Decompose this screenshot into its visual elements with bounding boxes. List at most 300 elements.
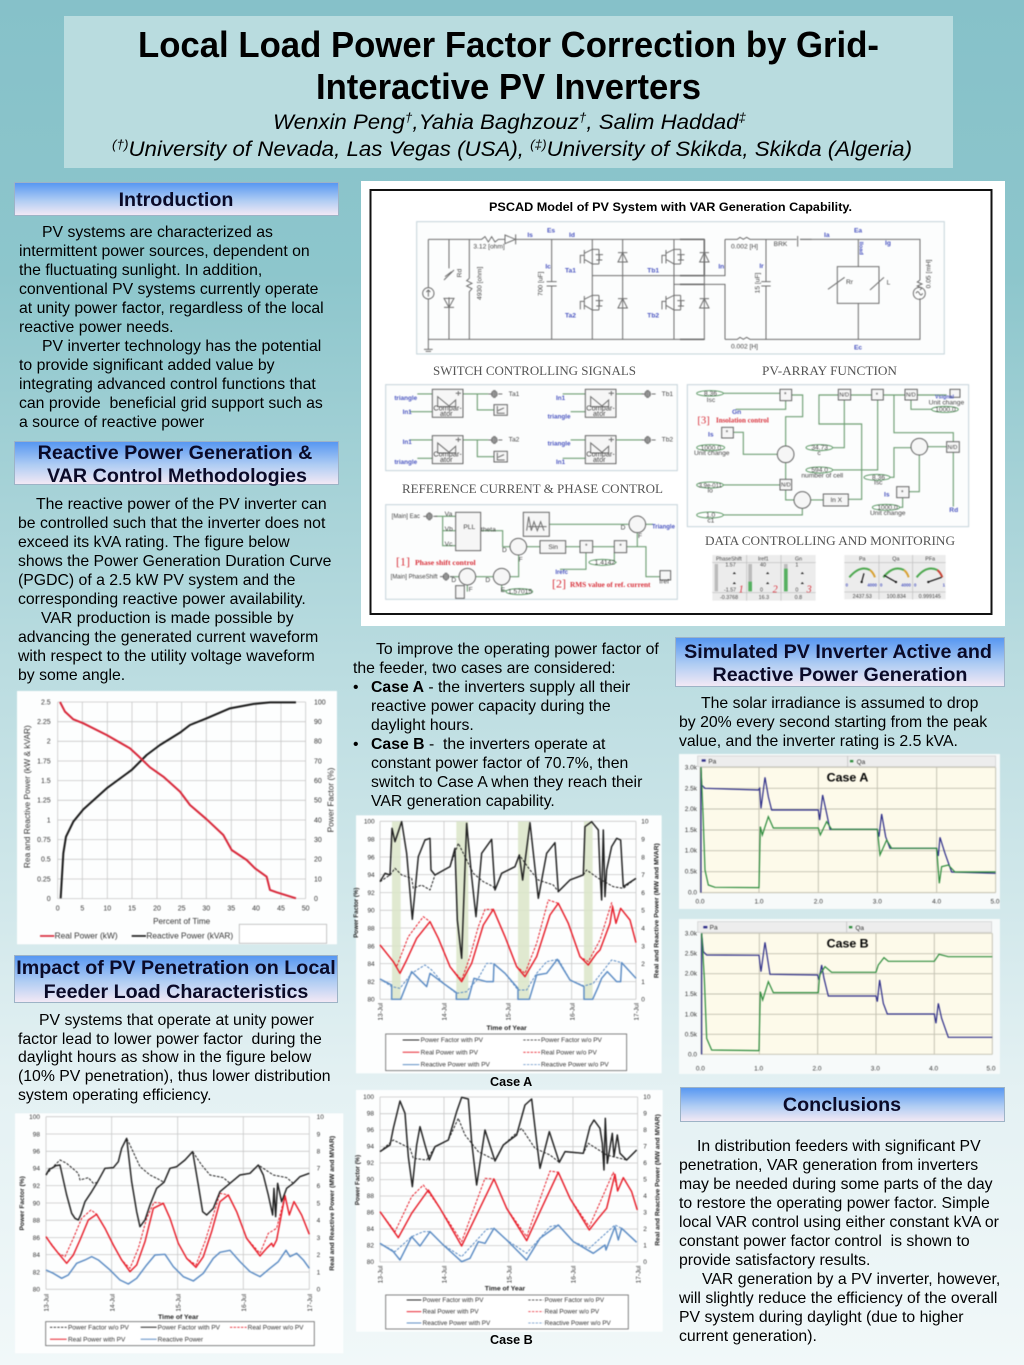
chart: case A time series: 80	[367, 997, 375, 1004]
monitoring: control sliders: 16.3	[759, 595, 769, 601]
monitoring: gauges: 0	[846, 582, 849, 587]
chart: case B time series: 100	[363, 1094, 374, 1101]
text block: introduction: the fluctuating sunlight. In addition,	[19, 262, 262, 279]
chart: power generation duration curve: 2.5	[41, 699, 51, 706]
schematic: switch controlling signals: Tb2	[662, 437, 673, 444]
chart: case A time series: Power Factor with PV	[421, 1037, 484, 1044]
schematic: PV-array function: Unit change	[694, 450, 730, 457]
schematic: PV-array function: [3]	[697, 415, 710, 426]
schematic: PV-array function: 3.9e-011	[699, 483, 723, 489]
chart: case A time series: Real and Reactive Power (MW and MVAR)	[654, 843, 661, 978]
chart: power factor with 10 percent PV: Power Factor w/o PV	[68, 1324, 130, 1331]
text block: reactive power: with respect to the utility voltage waveform	[17, 648, 315, 665]
schematic: reference current and phase control: PLL	[463, 524, 475, 531]
schematic: output filter: 0.002 [H]	[731, 243, 758, 250]
chart: power factor with 10 percent PV: 0	[317, 1287, 321, 1294]
chart: power generation duration curve: Power Factor (%)	[326, 767, 336, 832]
chart: case B time series: 0	[643, 1259, 647, 1266]
schematic: power circuit: Es	[547, 228, 555, 235]
chart: case B time series: 7	[643, 1144, 647, 1151]
chart: case B time series	[354, 1090, 663, 1332]
text block: impact: daylight hours as show in the figure below	[18, 1049, 312, 1066]
chart: power factor with 10 percent PV: Power Factor with PV	[158, 1324, 221, 1331]
chart: simulated output Case A: 4.0	[932, 898, 942, 905]
schematic: reference current and phase control: F	[638, 533, 642, 540]
text block: introduction: can provide beneficial grid support such as	[19, 395, 323, 412]
chart: power generation duration curve: 15	[128, 906, 136, 913]
chart: power factor with 10 percent PV: 3	[317, 1235, 321, 1242]
chart: simulated output Case B: 1.0k	[685, 1011, 698, 1018]
text block: impact: system operating efficiency.	[18, 1087, 211, 1104]
schematic: PV-array function: N/D	[948, 445, 957, 451]
chart: power factor with 10 percent PV: 15-Jul	[175, 1294, 182, 1312]
authors: ‡	[739, 110, 747, 125]
chart: power generation duration curve: 45	[277, 906, 285, 913]
heading: Simulated PV Inverter: Reactive Power Generation	[713, 664, 967, 686]
schematic: PV-array function: Gn	[732, 409, 741, 416]
authors: †	[405, 110, 413, 125]
chart: power factor with 10 percent PV: Real Power w/o PV	[248, 1324, 304, 1331]
chart: case B time series: 13-Jul	[378, 1266, 385, 1283]
chart: power generation duration curve: 10	[103, 906, 111, 913]
chart: simulated output Case B: 0.5k	[685, 1031, 698, 1038]
affiliations: (†)	[112, 137, 128, 152]
schematic: reference current and phase control: [2]	[552, 576, 566, 590]
monitoring: gauges: 4000	[867, 582, 878, 587]
schematic: output filter: BRK	[774, 241, 788, 248]
schematic: PV-array function: Insolation control	[716, 416, 769, 424]
chart: simulated output Case B: 2.0k	[685, 971, 698, 978]
chart: power factor with 10 percent PV: 7	[317, 1166, 321, 1173]
text block: solar irradiance: by 20% every second starting from the peak	[679, 714, 987, 731]
text block: solar irradiance: The solar irradiance is assumed to drop	[701, 695, 979, 712]
chart: simulated output Case A: Pa	[708, 758, 717, 765]
schematic: PV-array function: number of cell	[801, 472, 844, 479]
section label: reference current: REFERENCE CURRENT & PHASE CONTROL	[402, 482, 663, 496]
affiliations: (‡)	[530, 137, 547, 152]
VAR generation periods	[392, 821, 593, 999]
monitoring: gauges: 1	[943, 582, 946, 587]
schematic: reference current and phase control: Va	[445, 511, 453, 518]
schematic: output filter: 0.05 [mH]	[926, 259, 933, 288]
schematic: reference current and phase control: Vb	[445, 526, 453, 533]
schematic: output filter: L	[887, 280, 891, 287]
schematic: switch controlling signals: Compar-	[433, 450, 462, 459]
schematic: reference current and phase control: D	[621, 524, 626, 531]
authors: ,Yahia Baghzouz	[412, 110, 579, 134]
chart: power generation duration curve: 35	[227, 906, 235, 913]
text block: reactive power: (PGDC) of a 2.5 kW PV system and the	[18, 572, 296, 589]
monitoring: control sliders: 40	[760, 563, 766, 569]
text block: reactive power: exceed its kVA rating. The figure below	[18, 534, 290, 551]
text block: introduction: PV inverter technology has the potential	[42, 338, 321, 355]
chart: power generation duration curve: 0.75	[37, 837, 51, 844]
schematic: PV-array function: 1000.0	[935, 406, 956, 413]
chart: case A time series: 5	[641, 908, 645, 915]
monitoring: control sliders: 2	[773, 585, 778, 596]
chart: power factor with 10 percent PV: 1	[317, 1269, 321, 1276]
schematic: reference current and phase control: 1.57015	[508, 589, 532, 596]
text block: introduction: at unity power factor, regardless of the local	[19, 300, 324, 317]
chart: case A time series: 17-Jul	[634, 1003, 641, 1021]
text block: reactive power: be controlled such that the inverter does not	[18, 515, 326, 532]
chart: simulated output Case B	[679, 919, 1000, 1074]
schematic: switch controlling signals: Compar-	[586, 450, 615, 459]
chart: case B time series: Reactive Power w/o PV	[545, 1320, 612, 1327]
chart: power generation duration curve: 1.5	[41, 778, 51, 785]
chart: case A time series: 15-Jul	[506, 1003, 513, 1021]
schematic: reference current and phase control: F	[469, 586, 473, 593]
chart: power generation duration curve: 50	[314, 798, 322, 805]
chart: case A time series: 100	[364, 818, 375, 825]
schematic: reference current and phase control: theta	[481, 526, 496, 533]
schematic: switch controlling signals: ator	[593, 455, 606, 464]
chart: case B time series: 94	[367, 1144, 374, 1151]
chart: power generation duration curve: 0.5	[41, 857, 51, 864]
chart: case A time series: 94	[367, 872, 375, 879]
chart: simulated output Case A	[679, 754, 1000, 909]
chart: power generation duration curve: 25	[178, 906, 186, 913]
schematic: switch controlling signals: Tb1	[662, 391, 673, 398]
schematic: switch controlling signals: In1	[556, 395, 566, 402]
title	[138, 24, 879, 107]
schematic: output filter: Ea	[854, 228, 862, 235]
text block: solar irradiance	[679, 695, 987, 750]
affiliations: University of Nevada, Las Vegas (USA),	[128, 137, 530, 161]
schematic: PV-array function: c	[817, 450, 821, 457]
model frame	[370, 190, 992, 614]
chart: power factor with 10 percent PV	[15, 1113, 343, 1353]
schematic: switch controlling signals: In1	[556, 459, 566, 466]
text block: two cases: switch to Case A when they reach their	[371, 774, 642, 791]
schematic: switch controlling signals: Compar-	[433, 404, 462, 413]
text block: conclusions: local VAR control using either constant kVA or	[679, 1214, 999, 1231]
chart: case B time series: Real Power w/o PV	[545, 1309, 600, 1316]
schematic: PV-array function: Vsignal	[935, 395, 954, 401]
heading: Introduction	[14, 182, 338, 216]
schematic: PV-array function: Is	[884, 492, 890, 499]
schematic: power circuit: Id	[569, 232, 575, 239]
chart: power factor with 10 percent PV: 80	[33, 1287, 40, 1294]
schematic: PV-array function: Unit change	[870, 510, 906, 517]
chart: case B time series: 5	[643, 1177, 647, 1184]
monitoring: control sliders: -0.3768	[720, 595, 738, 601]
chart: case A time series: 8	[641, 854, 645, 861]
schematic: reference current and phase control: E	[501, 587, 506, 594]
chart: simulated output Case A: 5.0	[990, 898, 1000, 905]
schematic: reference current and phase control: Triangle	[652, 525, 676, 531]
schematic: power circuit: 4930 [ohm]	[476, 267, 483, 300]
text block: conclusions	[678, 1138, 1000, 1345]
chart: case B time series: 84	[367, 1226, 374, 1233]
chart: case A time series: Power Factor (%)	[353, 888, 360, 938]
schematic: PV-array function: Io	[707, 488, 713, 495]
chart: case A time series: 4	[641, 925, 645, 932]
chart: case A time series: 10	[641, 818, 649, 825]
chart: case B time series: 80	[367, 1259, 374, 1266]
text block: conclusions: VAR generation by a PV inverter, however,	[702, 1271, 1000, 1288]
text block: introduction	[19, 224, 324, 431]
schematic: PV-array function: 1000.0	[877, 504, 898, 511]
schematic: power circuit: Rd	[456, 269, 463, 277]
chart: power factor with 10 percent PV: 90	[33, 1200, 40, 1207]
chart: case B time series: 14-Jul	[442, 1266, 449, 1283]
schematic: switch controlling signals: triangle	[548, 413, 571, 420]
chart: power factor with 10 percent PV: 5	[317, 1200, 321, 1207]
header panel	[64, 16, 953, 168]
chart: power generation duration curve: 20	[314, 857, 322, 864]
monitoring: control sliders: 0	[760, 588, 763, 594]
chart: case B time series: 10	[643, 1094, 651, 1101]
chart: case A time series: 16-Jul	[569, 1003, 576, 1021]
caption: Case B: Case B	[490, 1333, 533, 1347]
schematic: switch controlling signals: In1	[403, 409, 412, 416]
schematic: switch controlling signals: Compar-	[586, 404, 615, 413]
text block: reactive power: The reactive power of the PV inverter can	[36, 496, 327, 513]
chart: simulated output Case B: Pa	[710, 925, 718, 932]
authors: †	[579, 110, 587, 125]
schematic: PV-array function: 1.0	[706, 512, 716, 519]
chart: power factor with 10 percent PV: 9	[317, 1131, 321, 1138]
chart: simulated output Case A: 3.0k	[685, 764, 698, 771]
text block: conclusions: may be needed during some parts of the day	[679, 1176, 993, 1193]
schematic: output filter: Ig	[885, 240, 891, 247]
chart: power factor with 10 percent PV: Real and Reactive Power (MW and MVAR)	[329, 1136, 336, 1271]
text block: introduction: conventional PV systems currently operate	[19, 281, 319, 298]
chart: case B time series: 96	[367, 1127, 374, 1134]
section label: switch controlling signals: SWITCH CONTROLLING SIGNALS	[433, 364, 636, 378]
schematic: PV-array function: Rd	[949, 507, 958, 514]
chart: power factor with 10 percent PV: 98	[33, 1131, 40, 1138]
text block: two cases: daylight hours.	[371, 717, 474, 734]
chart: simulated output Case B: 2.0	[812, 1065, 822, 1072]
text block: conclusions: to restore the operating power factor. Simple	[679, 1195, 990, 1212]
chart: case A time series: Real Power w/o PV	[541, 1049, 598, 1056]
chart: case B time series: 4	[643, 1193, 647, 1200]
chart: power factor with 10 percent PV: 100	[29, 1114, 40, 1121]
text block: two cases: constant power factor of 70.7%, then	[371, 755, 628, 772]
text block: impact: (10% PV penetration), thus lower distribution	[18, 1068, 331, 1085]
chart: case A time series: 13-Jul	[378, 1003, 385, 1021]
affiliations: University of Skikda, Skikda (Algeria)	[547, 137, 912, 161]
chart: power generation duration curve: 0.25	[37, 876, 51, 883]
heading: Reactive Power Generation: VAR Control Methodologies	[47, 465, 307, 487]
schematic: PV-array function: 594.0	[811, 467, 828, 474]
chart: case A time series: 2	[641, 961, 645, 968]
chart: case B time series: 88	[367, 1193, 374, 1200]
chart: simulated output Case B: 5.0	[986, 1065, 996, 1072]
chart: case B time series: 90	[367, 1177, 374, 1184]
text block: reactive power: shows the Power Generation Duration Curve	[18, 553, 332, 570]
schematic: PV-array function: *	[901, 489, 904, 496]
schematic: PV-array function: Unit change	[929, 400, 964, 407]
chart: case A time series: 90	[367, 908, 375, 915]
heading: Reactive Power Generation: Reactive Power Generation &	[38, 442, 312, 464]
schematic: power circuit: 3.12 [ohm]	[473, 243, 505, 250]
title: Local Load Power Factor Correction by Grid-	[138, 24, 879, 65]
schematic: PV-array function: c1	[707, 517, 715, 524]
chart: case A time series: 84	[367, 961, 375, 968]
chart: case B time series: 6	[643, 1160, 647, 1167]
monitoring: gauges: 100.834	[887, 594, 906, 600]
text block: conclusions: penetration, VAR generation from inverters	[679, 1157, 978, 1174]
chart: case B time series: 2	[643, 1226, 647, 1233]
chart: case A time series: 86	[367, 943, 375, 950]
chart: simulated output Case B: 4.0	[929, 1065, 939, 1072]
schematic: output filter: 0.002 [H]	[731, 343, 758, 350]
authors: Wenxin Peng	[273, 110, 400, 134]
heading: Impact of PV Penetration: Impact of PV Penetration on Local	[16, 957, 336, 979]
chart: power factor with 10 percent PV: 14-Jul	[109, 1294, 116, 1312]
monitoring: gauges: 4000	[901, 582, 912, 587]
chart: simulated output Case A: 1.0	[754, 898, 764, 905]
text block: conclusions: In distribution feeders with significant PV	[697, 1138, 981, 1155]
schematic: power circuit: Tb2	[647, 312, 659, 319]
schematic: switch controlling signals: triangle	[548, 441, 571, 448]
schematic: reference current and phase control: *	[585, 543, 588, 550]
section label: data controlling: DATA CONTROLLING AND MONITORING	[705, 534, 955, 548]
schematic: PV-array function: N/D	[839, 393, 849, 399]
chart: simulated output Case A: Case A	[827, 770, 868, 784]
chart: power generation duration curve: 70	[314, 758, 322, 765]
chart: case A time series: 9	[641, 836, 645, 843]
monitoring: control sliders: Gn	[795, 557, 802, 563]
chart: case A time series: 92	[367, 890, 375, 897]
chart: case A time series: Reactive Power w/o PV	[541, 1062, 609, 1069]
chart: power generation duration curve: 1	[47, 817, 51, 824]
chart: power factor with 10 percent PV: 8	[317, 1149, 321, 1156]
heading: Introduction: Introduction	[119, 189, 233, 211]
text block: conclusions: PV system during daylight (due to higher	[679, 1309, 964, 1326]
schematic: PV-array function: 8.36	[872, 474, 885, 481]
schematic: reference current and phase control: Phase shift control	[415, 558, 476, 567]
schematic: output filter: Ir	[759, 263, 764, 270]
schematic: PV-array function: 8.36	[704, 390, 717, 397]
schematic: switch controlling signals: Ta2	[509, 437, 520, 444]
chart: power factor with 10 percent PV: 17-Jul	[307, 1294, 314, 1312]
text block: two cases: •	[353, 679, 359, 696]
chart: simulated output Case A: 2.0	[814, 898, 823, 905]
chart: power generation duration curve: 2.25	[37, 719, 51, 726]
chart: case B time series: 17-Jul	[635, 1266, 642, 1283]
schematic: PV-array function: ln X	[831, 497, 843, 504]
text block: two cases: Case B - the inverters operate at	[371, 736, 606, 753]
chart: power generation duration curve: 0	[314, 896, 318, 903]
heading: Conclusions: Conclusions	[783, 1094, 901, 1116]
chart: case B time series: 92	[367, 1160, 374, 1167]
chart: case A time series: 0	[641, 997, 645, 1004]
schematic: reference current and phase control: Irefc	[555, 570, 569, 576]
monitoring: gauges	[844, 555, 946, 600]
schematic: PV-array function: *	[726, 430, 729, 437]
schematic: switch controlling signals: triangle	[394, 459, 418, 466]
schematic: switch controlling signals: ator	[440, 455, 453, 464]
schematic: reference current and phase control: D	[451, 577, 456, 584]
chart: power factor with 10 percent PV: 2	[317, 1252, 321, 1259]
chart: case B time series: 98	[367, 1111, 374, 1118]
chart: case B time series: Real Power with PV	[423, 1309, 479, 1316]
model title: PSCAD Model of PV System with VAR Generation Capability.	[489, 200, 852, 214]
chart: simulated output Case B: 0.0	[688, 1051, 697, 1058]
text block: solar irradiance: value, and the inverter rating is 2.5 kVA.	[679, 733, 958, 750]
chart: power factor with 10 percent PV: 84	[33, 1252, 40, 1259]
chart: simulated output Case B: 3.0k	[685, 930, 698, 937]
text block: two cases: VAR generation capability.	[371, 793, 555, 810]
chart: simulated output Case A: 2.0k	[685, 806, 698, 813]
chart: power generation duration curve	[17, 691, 337, 944]
chart: case A time series: Reactive Power with PV	[421, 1062, 491, 1069]
schematic: output filter	[680, 228, 933, 351]
chart: power factor with 10 percent PV: 13-Jul	[44, 1294, 51, 1312]
chart: case B time series: 86	[367, 1210, 374, 1217]
text block: reactive power: corresponding reactive power availability.	[18, 591, 306, 608]
schematic: output filter: Ia	[824, 232, 830, 239]
chart: power generation duration curve: 30	[314, 837, 322, 844]
text block: reactive power: advancing the generated current waveform	[18, 629, 318, 646]
schematic: power circuit: Ic	[545, 264, 551, 271]
schematic: PV-array function: 1000.0	[701, 445, 721, 452]
chart: simulated output Case A: 0.0	[688, 890, 697, 897]
schematic: PV-array function: *	[784, 392, 787, 399]
chart: power factor with 10 percent PV: 86	[33, 1235, 40, 1242]
text block: two cases: Case A - the inverters supply all their	[371, 679, 630, 696]
text block: reactive power	[17, 496, 332, 684]
chart: simulated output Case A: 1.5k	[685, 827, 698, 834]
panel: PSCAD model	[361, 181, 1005, 626]
text block: impact: PV systems that operate at unity power	[39, 1012, 314, 1029]
schematic: reference current and phase control: F	[519, 556, 523, 563]
chart: case A time series: 1	[641, 979, 645, 986]
schematic: output filter: 15 [uF]	[754, 272, 761, 293]
chart: power generation duration curve: 20	[153, 906, 161, 913]
chart: simulated output Case B: 2.5k	[685, 951, 698, 958]
schematic: PV-array function: 34.73	[811, 445, 828, 452]
chart: power generation duration curve: Reactive Power (kVAR)	[146, 931, 233, 941]
chart: power generation duration curve: 60	[314, 778, 322, 785]
chart: case A time series: 6	[641, 890, 645, 897]
schematic: output filter: Ec	[854, 344, 862, 351]
chart: power generation duration curve: 2	[47, 739, 51, 746]
chart: case A time series: 7	[641, 872, 645, 879]
chart: simulated output Case A: 3.0	[873, 898, 882, 905]
schematic: PV-array function	[687, 385, 969, 527]
schematic: reference current and phase control: RMS value of ref. current	[570, 580, 651, 589]
text block: reactive power: VAR production is made possible by	[41, 610, 294, 627]
chart: power factor with 10 percent PV: 10	[317, 1114, 324, 1121]
chart: simulated output Case B: 0.0	[696, 1065, 705, 1072]
chart: power generation duration curve: 0	[56, 906, 60, 913]
chart: power factor with 10 percent PV: 6	[317, 1183, 321, 1190]
chart: power generation duration curve: 40	[314, 817, 322, 824]
chart: simulated output Case A: 2.5k	[685, 785, 698, 792]
text block: two cases: •	[353, 736, 359, 753]
monitoring: control sliders: Iref1	[758, 557, 769, 563]
monitoring: gauges: 0	[880, 582, 883, 587]
text block: impact: factor lead to lower power factor during the	[18, 1031, 322, 1048]
text block: conclusions: will slightly reduce the efficiency of the overall	[678, 1290, 997, 1307]
chart: power generation duration curve: 10	[314, 876, 322, 883]
title: Interactive PV Inverters	[316, 66, 701, 107]
monitoring: control sliders: PhaseShift	[716, 557, 742, 563]
monitoring: control sliders: 0.8	[795, 595, 802, 601]
text block: introduction: integrating advanced control functions that	[19, 376, 316, 393]
schematic: reference current and phase control: Sin	[548, 544, 558, 551]
chart: power factor with 10 percent PV: 82	[33, 1269, 40, 1276]
chart: simulated output Case A: Qa	[857, 759, 866, 766]
schematic: reference current and phase control	[386, 505, 677, 599]
chart: power generation duration curve: 80	[314, 739, 322, 746]
schematic: power circuit: Ta2	[565, 312, 576, 319]
